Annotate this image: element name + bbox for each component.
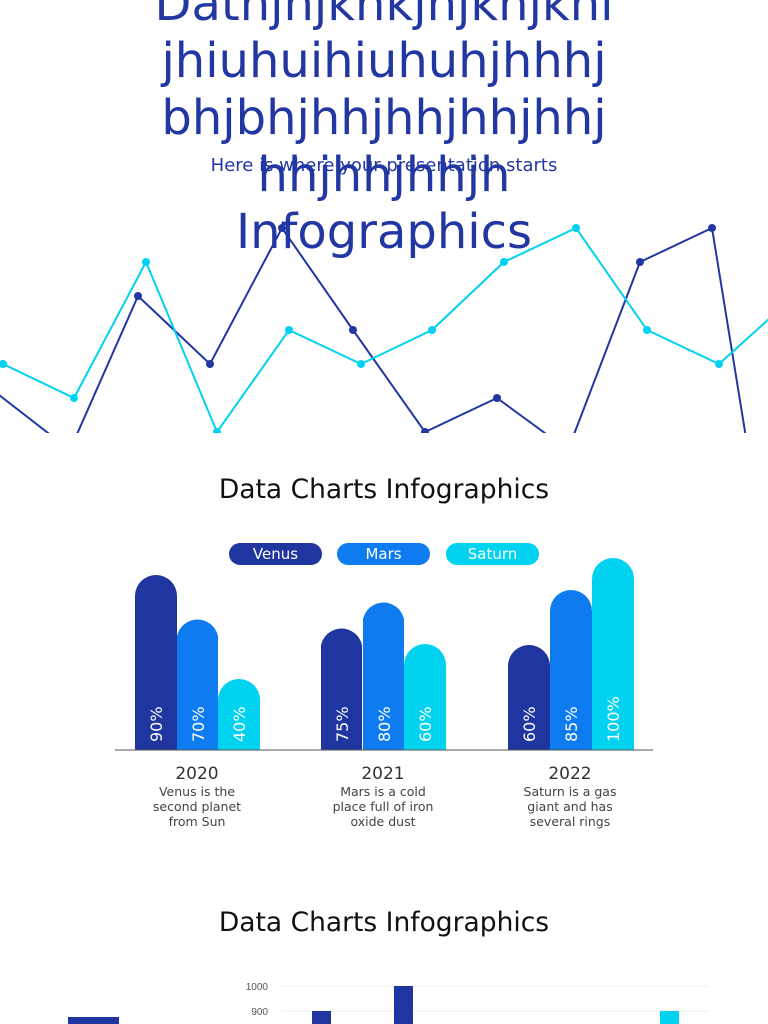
title: jhiuhuihiuhuhjhhhj — [161, 33, 607, 89]
line chart background — [0, 224, 768, 433]
bar chart: 80% — [375, 706, 394, 742]
bar chart: 100% — [604, 696, 623, 742]
captions: 2020 — [175, 764, 219, 784]
captions: 2022 — [548, 764, 592, 784]
title: Infographics — [236, 204, 532, 260]
legend — [229, 543, 539, 565]
title: hhjhhjhhjh — [258, 147, 510, 203]
legend: Saturn — [468, 545, 517, 563]
title: bhjbhjhhjhhjhhjhhj — [161, 90, 607, 146]
captions: 2021 — [361, 764, 405, 784]
bar chart: 60% — [416, 706, 435, 742]
bar chart: 70% — [189, 706, 208, 742]
heading: chart 1: Data Charts Infographics — [219, 474, 549, 505]
bar chart 2 — [68, 982, 708, 1024]
title — [155, 0, 613, 260]
bar chart: 60% — [520, 706, 539, 742]
captions — [153, 764, 616, 829]
heading: chart 2: Data Charts Infographics — [219, 907, 549, 938]
bar chart: 40% — [230, 706, 249, 742]
captions: Mars is a cold place full of iron oxide dust — [333, 784, 433, 829]
bar chart 2: 1000 — [246, 982, 268, 993]
bar chart: 90% — [147, 706, 166, 742]
legend: Mars — [365, 545, 402, 563]
captions: Venus is the second planet from Sun — [153, 784, 241, 829]
subtitle: Here is where your presentation starts — [211, 155, 557, 176]
captions: Saturn is a gas giant and has several rings — [524, 784, 616, 829]
bar chart 2: 900 — [251, 1007, 268, 1018]
bar chart: 75% — [333, 706, 352, 742]
legend: Venus — [253, 545, 298, 563]
bar chart: 85% — [562, 706, 581, 742]
bar chart — [115, 558, 653, 750]
